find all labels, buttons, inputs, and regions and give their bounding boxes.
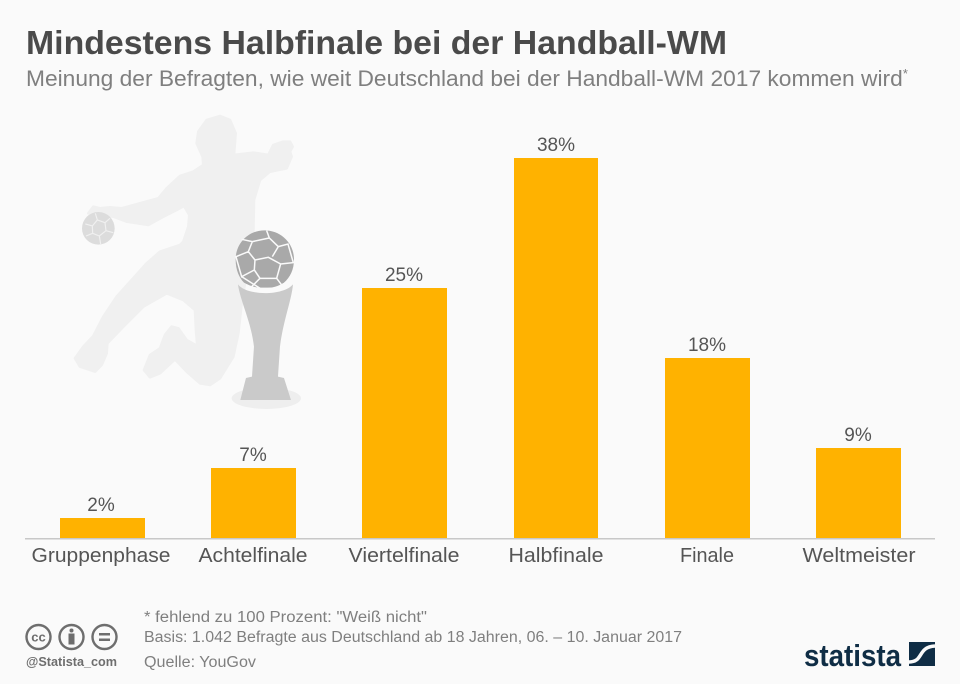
bar: Gruppenphase [32, 495, 170, 567]
bar: Viertelfinale [348, 265, 460, 567]
bar: Weltmeister: Weltmeister [802, 545, 916, 567]
bar: Finale: 18% [688, 335, 726, 356]
icon: cc license [26, 625, 116, 649]
subtitle: Meinung der Befragten, wie weit Deutschland bei der Handball-WM 2017 kommen wird [26, 66, 873, 91]
illustration: handball player silhouette [75, 116, 293, 385]
footnotes [144, 609, 682, 671]
bar: Finale [665, 335, 750, 567]
bar: Weltmeister [802, 425, 916, 567]
footnotes: Basis: 1.042 Befragte aus Deutschland ab 18 Jahren, 06. – 10. Januar 2017 [144, 629, 682, 646]
icon: statista mark [909, 642, 935, 666]
bar: Viertelfinale: 25% [385, 265, 423, 286]
bar: Halbfinale: 38% [537, 135, 575, 156]
bar: Achtelfinale: 7% [239, 445, 267, 466]
bar: Gruppenphase: Gruppenphase [32, 545, 170, 567]
subtitle: * [903, 66, 908, 81]
bar: Halbfinale: Halbfinale [508, 545, 604, 567]
bar: Gruppenphase: 2% [87, 495, 115, 516]
icon: attribution [60, 625, 84, 649]
title: Mindestens Halbfinale bei der Handball-WM [26, 24, 727, 61]
bar: Achtelfinale: Achtelfinale [198, 545, 308, 567]
statista logo: statista [804, 638, 902, 673]
icon: trophy ball [236, 230, 294, 288]
bar: Finale: Finale [680, 545, 734, 567]
social handle: @Statista_com [26, 655, 117, 669]
icon: cc: cc [31, 630, 46, 644]
trophy cup [238, 284, 293, 400]
bar: Viertelfinale: Viertelfinale [348, 545, 460, 567]
icon: no derivatives [92, 625, 116, 649]
icon: player's handball [82, 212, 115, 245]
trophy base shadow [232, 388, 301, 409]
bar: Weltmeister: 9% [844, 425, 872, 446]
bar: Achtelfinale [198, 445, 308, 567]
footnotes: Quelle: YouGov [144, 654, 256, 671]
footnotes: * fehlend zu 100 Prozent: "Weiß nicht" [144, 609, 427, 626]
bar: Halbfinale [508, 135, 604, 567]
bar chart [25, 135, 935, 567]
illustration: trophy with ball [232, 230, 301, 409]
